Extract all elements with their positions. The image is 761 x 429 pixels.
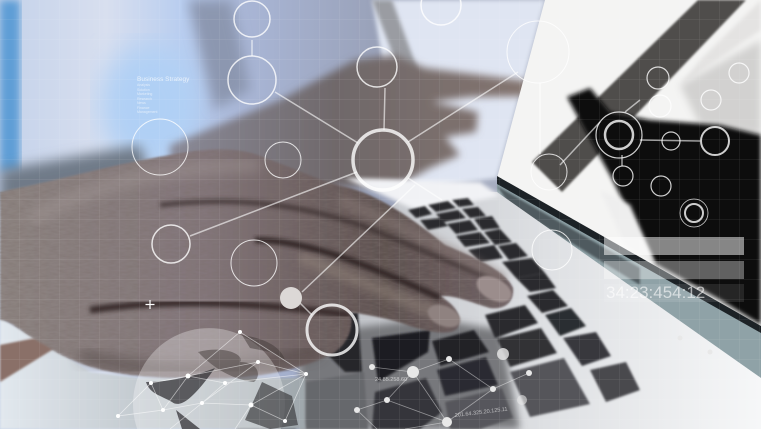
bright deck edge behind knuckles xyxy=(345,178,500,212)
globe network lines xyxy=(118,332,306,429)
large node circles xyxy=(132,0,572,286)
network connector lines xyxy=(190,40,700,315)
plus marker xyxy=(146,300,154,309)
reflected hand on screen xyxy=(170,55,540,190)
globe network dots xyxy=(116,330,308,423)
business strategy label: Finance xyxy=(137,106,150,110)
main hand on keyboard xyxy=(0,149,516,379)
laptop lid reflection panel xyxy=(372,0,545,190)
small IP address labels: 24.85.258.60 xyxy=(375,377,407,383)
small IP address labels xyxy=(375,377,508,419)
business strategy label: Research xyxy=(137,97,152,101)
network diagram xyxy=(132,0,749,355)
desk and cuff area xyxy=(0,318,305,429)
screen edge band xyxy=(497,176,761,378)
business strategy label: Business Strategy xyxy=(137,76,190,83)
keyboard network lines xyxy=(357,359,529,429)
screen number readout: 34:23:454:12 xyxy=(606,283,705,302)
small IP address labels: 201.64.325.20.125.11 xyxy=(455,407,508,419)
business strategy label: Solution xyxy=(137,88,150,92)
business strategy label: Marketing xyxy=(137,92,152,96)
laptop screen xyxy=(497,0,761,328)
dark reflection on screen xyxy=(567,88,761,325)
filled nodes on hand and keyboard xyxy=(146,287,712,429)
keyboard keys xyxy=(236,198,640,429)
screen data bars xyxy=(604,237,744,302)
dark under-keyboard area xyxy=(300,318,520,429)
business strategy label: Analysis xyxy=(137,83,150,87)
business strategy label: Management xyxy=(137,110,157,114)
screen node circles xyxy=(596,63,749,227)
highlighted node circles xyxy=(353,130,413,190)
business strategy label xyxy=(137,76,190,114)
keyboard deck xyxy=(300,190,761,429)
keyboard network dots xyxy=(354,288,712,427)
globe xyxy=(116,328,308,429)
business strategy label: News xyxy=(137,101,146,105)
